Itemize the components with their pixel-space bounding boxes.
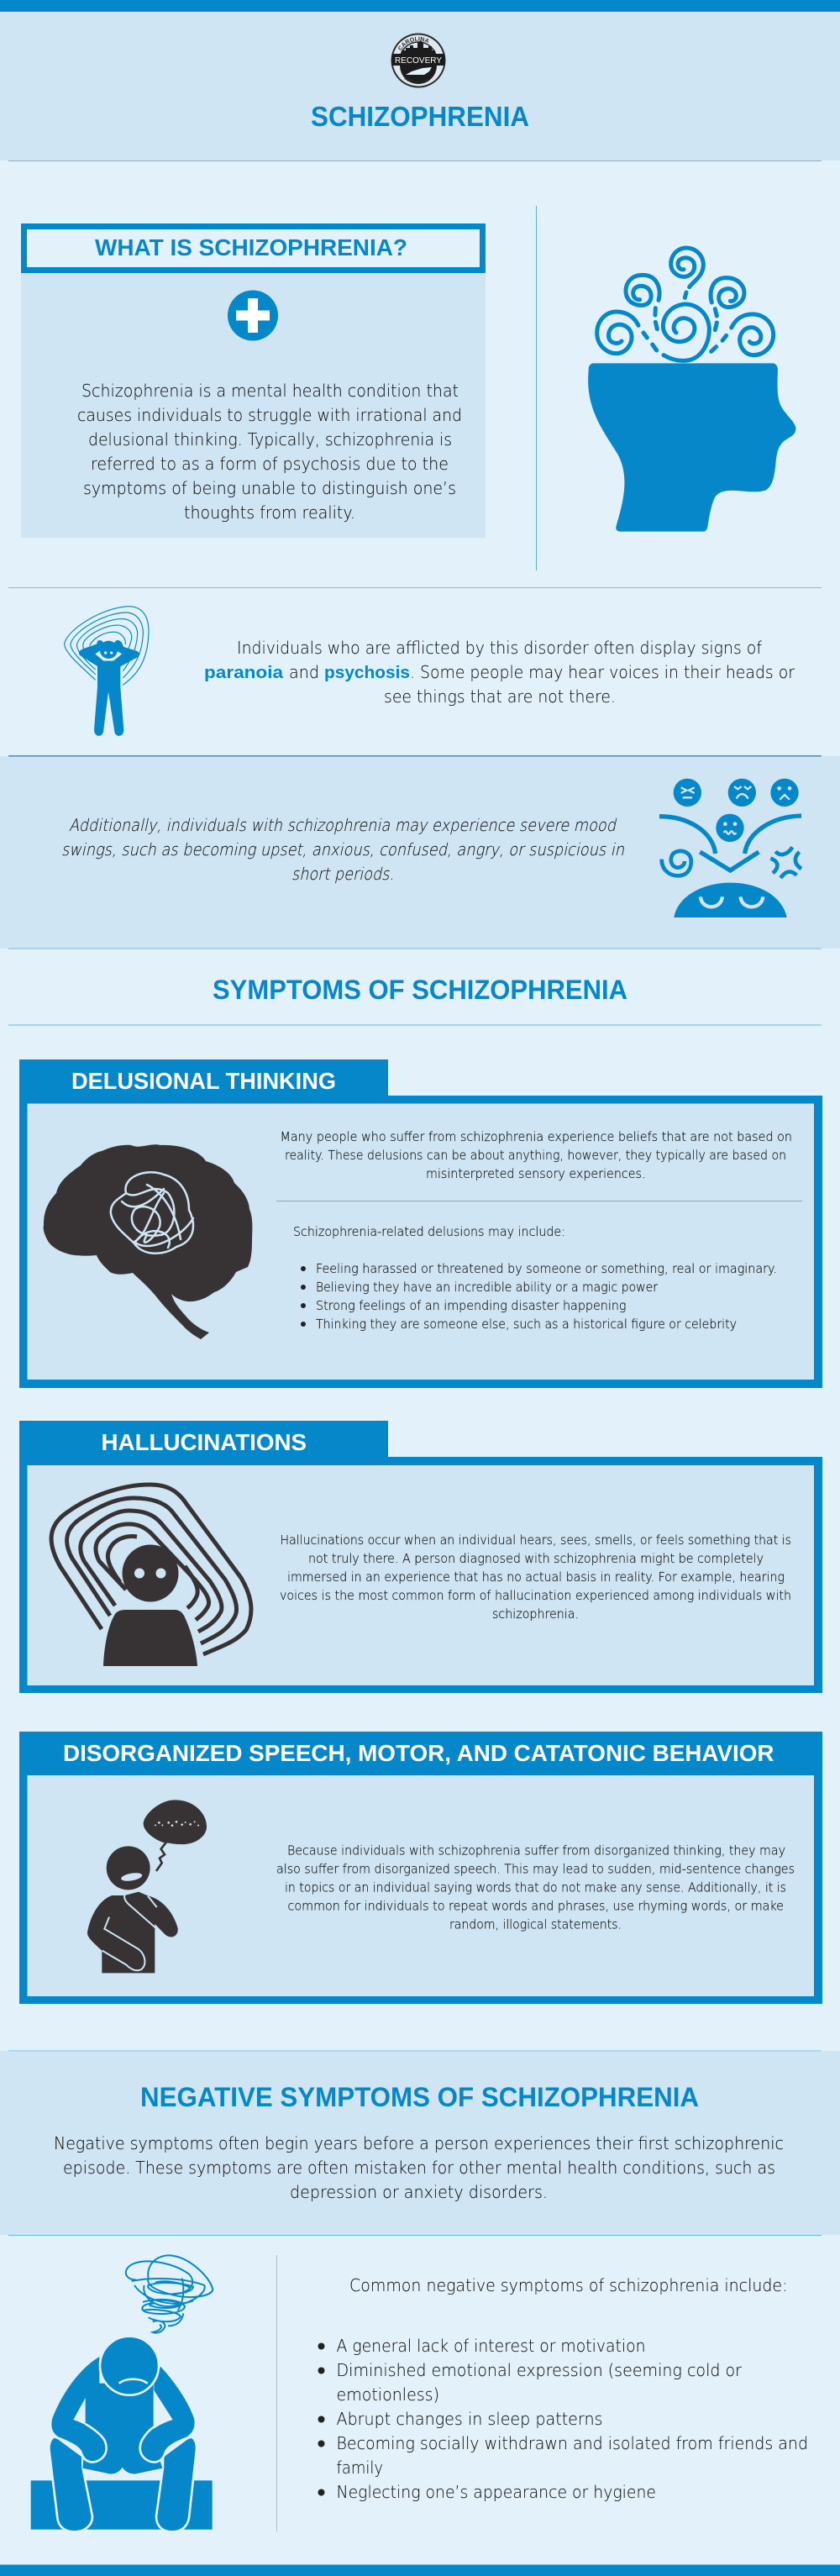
heading: symptoms: SYMPTOMS OF SCHIZOPHRENIA xyxy=(213,975,627,1005)
text: delusions intro: misinterpreted sensory experiences. xyxy=(426,1166,645,1181)
heading: hallucinations: HALLUCINATIONS xyxy=(101,1429,307,1455)
text: paranoia and psychosis: and xyxy=(289,662,319,682)
panel: delusional thinking xyxy=(19,1059,822,1388)
text: common negative symptoms list: Abrupt changes in sleep patterns xyxy=(336,2409,603,2429)
text: common negative symptoms list: Diminished emotional expression (seeming cold or xyxy=(336,2360,743,2380)
text: delusions list: Strong feelings of an impending disaster happening xyxy=(316,1298,627,1313)
bottom bar xyxy=(0,2564,840,2576)
text: mood swings: Additionally, individuals with schizophrenia may experience severe mood xyxy=(68,815,619,835)
icon: person with hallucination rings xyxy=(51,1485,251,1666)
text: delusions list: Schizophrenia-related delusions may include: xyxy=(293,1224,565,1239)
icon: brain with tangle xyxy=(44,1144,252,1339)
text: common negative symptoms list: emotionless) xyxy=(336,2384,439,2405)
heading: negative symptoms: NEGATIVE SYMPTOMS OF SCHIZOPHRENIA xyxy=(140,2082,699,2112)
icon: Carolina Recovery logo: RECOVERY xyxy=(395,56,442,66)
icon: medical cross xyxy=(228,291,278,341)
text: definition xyxy=(77,381,462,523)
text: disorganized speech: common for individuals to repeat words and phrases, use rhyming words, or make xyxy=(287,1899,784,1914)
text: definition: Schizophrenia is a mental health condition that xyxy=(81,381,459,401)
text: definition: delusional thinking. Typically, schizophrenia is xyxy=(88,429,452,449)
heading box xyxy=(24,227,482,271)
text: definition: thoughts from reality. xyxy=(184,502,355,523)
text: disorganized speech: random, illogical statements. xyxy=(449,1917,622,1932)
icon: seated person with scribble xyxy=(31,2255,213,2531)
text: delusions list: Thinking they are someone else, such as a historical figure or celebrity xyxy=(316,1317,737,1332)
text: common negative symptoms list: family xyxy=(336,2458,383,2478)
panel: negative symptoms xyxy=(0,2050,840,2236)
text: hallucinations: not truly there. A person diagnosed with schizophrenia might be completely xyxy=(308,1551,764,1566)
text: definition: symptoms of being unable to distinguish one’s xyxy=(83,478,456,498)
text: hallucinations: schizophrenia. xyxy=(492,1606,579,1622)
top bar xyxy=(0,0,840,12)
text: hallucinations: Hallucinations occur when an individual hears, sees, smells, or feels something that is xyxy=(281,1532,791,1548)
text: common negative symptoms list: A general lack of interest or motivation xyxy=(336,2336,645,2356)
panel: disorganized speech xyxy=(19,1732,822,2004)
icon: Carolina Recovery logo: CENTER FOR xyxy=(404,77,430,84)
text: hallucinations xyxy=(280,1532,791,1622)
text: delusions intro: Many people who suffer from schizophrenia experience beliefs that are not based on xyxy=(281,1129,792,1144)
text: paranoia and psychosis: Individuals who are afflicted by this disorder often display signs of xyxy=(237,638,762,658)
panel: what is schizophrenia xyxy=(21,227,486,538)
heading: disorganized speech: DISORGANIZED SPEECH, MOTOR, AND CATATONIC BEHAVIOR xyxy=(63,1740,774,1766)
text: delusions intro: reality. These delusions can be about anything, however, they typically are based on xyxy=(285,1148,786,1163)
text: paranoia and psychosis: paranoia xyxy=(204,664,284,682)
text: delusions list: Believing they have an incredible ability or a magic power xyxy=(316,1280,659,1295)
text: delusions intro xyxy=(281,1129,792,1181)
text: delusions list: Feeling harassed or threatened by someone or something, real or imaginary. xyxy=(316,1261,777,1276)
text: hallucinations: voices is the most common form of hallucination experienced among individuals with xyxy=(280,1588,791,1603)
icon: person with speech bubble xyxy=(87,1800,207,1973)
icon: moods and faces xyxy=(659,779,801,917)
text: negative symptoms intro xyxy=(54,2133,784,2202)
heading box: WHAT IS SCHIZOPHRENIA? xyxy=(95,234,407,260)
text: negative symptoms intro: episode. These symptoms are often mistaken for other mental health conditions, such as xyxy=(63,2158,775,2178)
text: paranoia and psychosis: . Some people may hear voices in their heads or xyxy=(410,662,795,682)
text: delusions list xyxy=(293,1224,777,1332)
text: negative symptoms intro: Negative symptoms often begin years before a person experiences their first schizophrenic xyxy=(54,2133,784,2153)
panel: hallucinations xyxy=(19,1421,822,1693)
icon: Carolina Recovery logo xyxy=(391,34,445,87)
icon: head with spirals xyxy=(588,248,795,532)
text: definition: referred to as a form of psychosis due to the xyxy=(91,454,449,474)
text: paranoia and psychosis: psychosis xyxy=(324,664,410,682)
text: common negative symptoms list xyxy=(318,2275,808,2502)
text: paranoia and psychosis: see things that are not there. xyxy=(384,686,616,707)
text: hallucinations: immersed in an experience that has no actual basis in reality. For example, hearing xyxy=(287,1569,785,1585)
text: disorganized speech: Because individuals with schizophrenia suffer from disorganized thinking, they may xyxy=(287,1843,785,1858)
icon: Carolina Recovery logo: CAROLINA xyxy=(398,37,428,50)
text: mood swings: short periods. xyxy=(291,864,397,884)
text: disorganized speech: in topics or an individual saying words that do not make any sense. Additionally, it is xyxy=(285,1880,786,1895)
text: mood swings xyxy=(60,815,627,884)
text: negative symptoms intro: depression or anxiety disorders. xyxy=(290,2182,548,2202)
text: disorganized speech: also suffer from disorganized speech. This may lead to sudden, mid-sentence changes xyxy=(276,1862,795,1877)
panel: header xyxy=(0,12,840,161)
heading: delusional thinking: DELUSIONAL THINKING xyxy=(71,1068,336,1094)
text: common negative symptoms list: Becoming socially withdrawn and isolated from friends and xyxy=(336,2433,808,2453)
text: mood swings: swings, such as becoming upset, anxious, confused, angry, or suspicious in xyxy=(60,839,627,860)
text: common negative symptoms list: Neglecting one’s appearance or hygiene xyxy=(336,2482,656,2502)
text: definition: causes individuals to struggle with irrational and xyxy=(77,405,462,425)
panel: mood swings xyxy=(0,755,840,949)
text: disorganized speech xyxy=(276,1843,795,1932)
text: common negative symptoms list: Common negative symptoms of schizophrenia include: xyxy=(349,2275,788,2295)
title: SCHIZOPHRENIA xyxy=(311,101,529,132)
icon: person holding head with rings xyxy=(65,607,149,736)
text: paranoia and psychosis xyxy=(204,638,795,707)
